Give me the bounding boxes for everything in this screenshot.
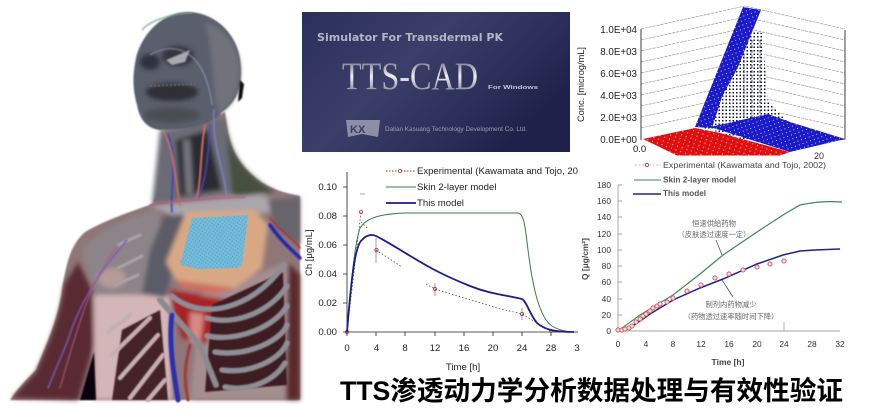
annotation: constant-rate supply: 恒速供給药物 — [692, 219, 736, 228]
skull shading — [205, 22, 240, 114]
y ticks: 80 — [602, 261, 611, 271]
heart cavity — [168, 290, 230, 345]
y axis title: Conc. [microg/mL] — [576, 47, 587, 122]
legend — [386, 166, 578, 209]
red surface — [643, 128, 790, 156]
chart: plasma concentration vs time — [304, 166, 580, 373]
legend: Skin 2-layer model — [663, 176, 736, 184]
sternum — [142, 214, 184, 298]
transdermal patch — [180, 215, 248, 269]
y axis tick labels: 6.0E+03 — [600, 69, 638, 80]
axis titles: Time [h] — [712, 357, 745, 367]
y ticks: 100 — [597, 245, 611, 255]
x ticks: 12 — [430, 343, 440, 354]
right ribcage ground — [190, 262, 300, 400]
back grid lines — [641, 6, 845, 128]
y ticks — [318, 182, 338, 338]
x ticks: 24 — [517, 343, 528, 354]
x ticks: 3 — [574, 343, 580, 354]
left ribs — [108, 315, 165, 400]
annotation: constant-rate supply — [678, 219, 750, 255]
lower chest skin — [94, 295, 172, 400]
y ticks: 60 — [602, 277, 611, 287]
splash product name: TTS-CAD — [342, 55, 478, 98]
y axis tick labels: 0.0E+00 — [600, 135, 638, 146]
x ticks: 24 — [779, 339, 789, 349]
right flank — [286, 262, 300, 400]
y axis tick labels: 4.0E+03 — [600, 91, 638, 102]
x ticks: 8 — [671, 339, 676, 349]
x ticks: 16 — [459, 343, 469, 354]
panel: TTS-CAD splash screen — [302, 12, 570, 152]
y axis tick labels: 1.0E+04 — [600, 25, 638, 36]
mesh interior — [700, 30, 800, 140]
x axis labels: 0.0 — [633, 144, 646, 155]
y ticks — [597, 180, 611, 336]
axes — [618, 185, 840, 331]
x ticks — [616, 339, 845, 349]
right shoulder — [268, 197, 300, 245]
chart: cumulative permeation vs time — [580, 161, 845, 367]
series: experimental — [616, 259, 786, 332]
marker: 24 h arrow — [783, 322, 785, 331]
company line: Dalian Kasuang Technology Development Co. Ltd. — [385, 127, 527, 133]
y axis tick labels — [600, 25, 638, 146]
x ticks: 0 — [616, 339, 621, 349]
legend: This model — [663, 189, 706, 198]
body silhouette — [10, 112, 300, 400]
rib cavities — [205, 272, 287, 392]
y ticks: 180 — [597, 180, 611, 190]
x ticks: 20 — [488, 343, 498, 354]
x ticks: 4 — [644, 339, 649, 349]
illustration: human torso with transdermal patch — [10, 12, 300, 400]
x ticks: 0 — [344, 343, 350, 354]
chart: 3D concentration surface: 20 — [814, 151, 824, 161]
x ticks: 28 — [546, 343, 556, 354]
logo: KX badge — [346, 120, 380, 137]
axes — [641, 29, 845, 140]
series: experimental — [345, 194, 553, 334]
y ticks: 20 — [602, 310, 611, 320]
title: TTS渗透动力学分析数据处理与有效性验证 — [340, 376, 843, 406]
splash subtitle: Simulator For Transdermal PK — [317, 32, 504, 44]
series: skin 2-layer model — [347, 213, 574, 332]
y ticks: 0.10 — [318, 182, 337, 193]
axis titles: Time [h] — [446, 362, 480, 373]
axes — [343, 172, 578, 336]
logo: KX badge: KX — [350, 124, 366, 136]
series: this model — [347, 235, 574, 332]
head — [133, 12, 241, 130]
legend: Skin 2-layer model — [417, 182, 496, 193]
legend: This model — [417, 198, 464, 209]
y axis tick labels: 8.0E+03 — [600, 47, 638, 58]
upper chest skin — [82, 210, 170, 305]
legend — [633, 161, 826, 198]
y ticks: 140 — [597, 212, 611, 222]
annotation: constant-rate supply: （皮肤透过速度一定） — [678, 230, 750, 239]
x ticks: 16 — [724, 339, 734, 349]
series: skin 2-layer model — [618, 202, 842, 331]
legend: Experimental (Kawamata and Tojo, 2002) — [663, 161, 826, 170]
y ticks: 40 — [602, 294, 611, 304]
vessels — [48, 110, 300, 400]
chart: 3D concentration surface — [576, 6, 845, 161]
costal cartilage — [160, 300, 216, 385]
y ticks: 0.08 — [318, 211, 337, 222]
annotation: drug reduction in formulation: 制剂内药物减少 — [705, 300, 757, 309]
y ticks: 0.02 — [318, 298, 337, 309]
x ticks: 28 — [807, 339, 817, 349]
annotation: drug reduction in formulation: （药物透过速率随时间下降） — [684, 312, 778, 321]
neck — [152, 118, 232, 204]
annotation: drug reduction in formulation — [684, 280, 778, 321]
y ticks: 0.04 — [318, 269, 338, 280]
chart: plasma concentration vs time: Ch [μg/mL] — [304, 229, 315, 276]
x ticks: 20 — [752, 339, 762, 349]
series: this model — [618, 249, 840, 331]
x ticks: 4 — [374, 343, 380, 354]
splash platform label: For Windows — [488, 85, 538, 91]
x ticks — [344, 343, 580, 354]
y ticks: 160 — [597, 196, 611, 206]
right ribs — [172, 265, 287, 388]
blue surface — [695, 7, 761, 128]
neck shadow — [222, 113, 276, 196]
legend: Experimental (Kawamata and Tojo, 20 — [417, 166, 578, 177]
x ticks: 32 — [835, 339, 845, 349]
tan area around patch — [166, 210, 268, 290]
y ticks: 0 — [606, 326, 611, 336]
chart: cumulative permeation vs time: Q [μg/cm²] — [580, 238, 590, 280]
y axis tick labels: 2.0E+03 — [600, 113, 638, 124]
x ticks: 8 — [402, 343, 408, 354]
y ticks: 0.00 — [318, 327, 337, 338]
left arm — [12, 262, 94, 400]
y ticks: 0.06 — [318, 240, 337, 251]
y ticks: 120 — [597, 229, 611, 239]
shoulder top — [150, 194, 285, 218]
x ticks: 12 — [696, 339, 706, 349]
